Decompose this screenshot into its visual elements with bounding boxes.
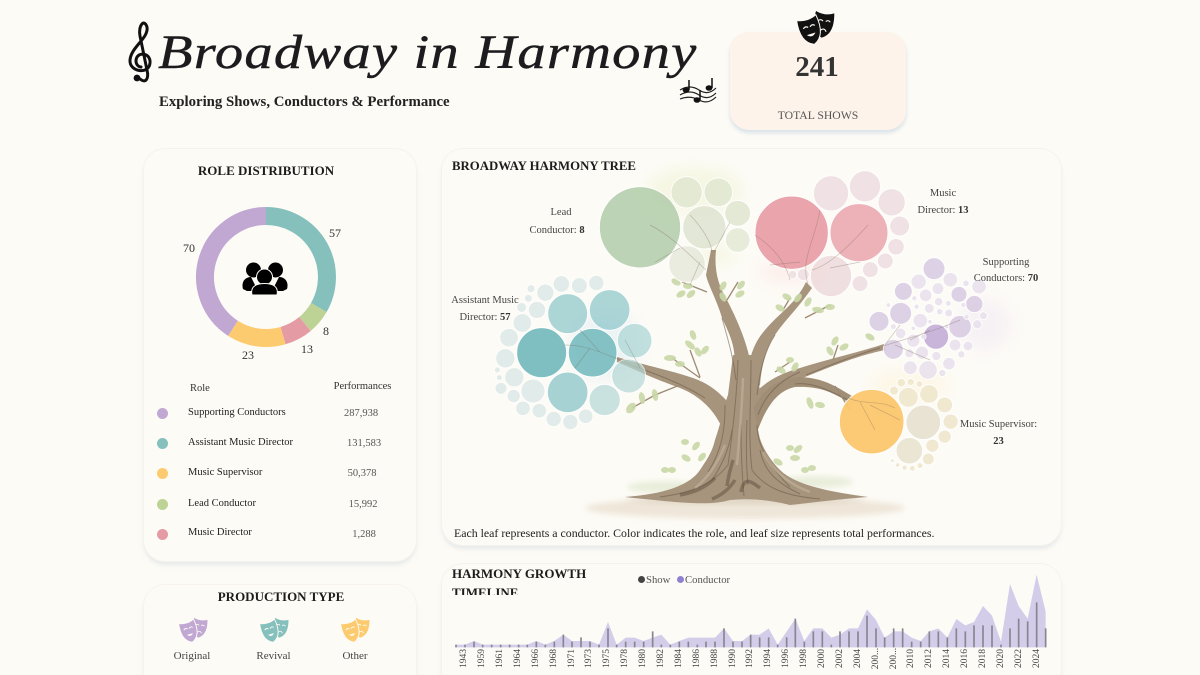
- label: music director: Director: 13: [917, 205, 969, 216]
- year axis labels: 1978: [620, 649, 630, 668]
- panel: harmony growth timeline: [441, 563, 1062, 675]
- label: lead conductor: Conductor: 8: [529, 224, 585, 236]
- KPI label: TOTAL SHOWS: [778, 109, 858, 122]
- year axis labels: 2000: [817, 649, 827, 668]
- year axis labels: 2020: [996, 649, 1006, 668]
- conductor area and show bars: [456, 575, 1046, 647]
- year axis labels: 2010: [906, 649, 916, 668]
- legend row: assistant music director: [157, 437, 381, 449]
- label: assistant music director: Assistant Music: [451, 295, 519, 306]
- year axis labels: 1980: [638, 649, 648, 668]
- label: music director: [917, 188, 969, 216]
- text: 23: [242, 348, 254, 362]
- heading: role distribution: ROLE DISTRIBUTION: [198, 163, 334, 178]
- year axis labels: 2004: [853, 649, 863, 668]
- icon: theatre masks: [797, 10, 834, 44]
- year axis labels: 2002: [835, 649, 845, 668]
- legend: show and conductor: Show: [646, 574, 670, 586]
- year axis labels: 2016: [960, 649, 970, 668]
- label: music supervisor: 23: [993, 436, 1004, 447]
- label: assistant music director: [451, 295, 519, 323]
- label: supporting conductors: Conductors: 70: [974, 273, 1038, 284]
- legend row: music director: Music Director: [188, 527, 252, 538]
- watercolor washes: [570, 168, 1011, 399]
- legend row: supporting conductors: [157, 407, 378, 419]
- icon: treble clef: [128, 22, 152, 82]
- table header: role: Role: [190, 382, 210, 394]
- panel: role distribution: [143, 148, 417, 562]
- year axis labels: 1994: [763, 649, 773, 668]
- leaf cluster: assistant music director: [494, 275, 652, 430]
- legend row: music supervisor: 50,378: [348, 468, 376, 479]
- year axis labels: 1992: [745, 649, 755, 668]
- tree trunk and branches: [617, 250, 885, 505]
- year axis labels: 1975: [602, 649, 612, 668]
- year axis labels: 1998: [799, 649, 809, 668]
- label: supporting conductors: [974, 257, 1038, 284]
- legend row: lead conductor: [157, 498, 377, 510]
- year axis labels: 1964: [513, 649, 523, 668]
- year axis labels: 200...: [871, 648, 881, 669]
- legend row: supporting conductors: Supporting Conductors: [188, 407, 286, 418]
- leaf cluster: music supervisor: [839, 378, 958, 471]
- year axis labels: 2018: [978, 649, 988, 668]
- year axis labels: 1959: [477, 649, 487, 668]
- year axis labels: 1988: [710, 649, 720, 668]
- title: Broadway in Harmony: [158, 26, 697, 79]
- label: lead conductor: Lead: [550, 206, 572, 218]
- leaf cluster: music director: [755, 171, 910, 297]
- year axis labels: 1971: [567, 649, 577, 668]
- label: music supervisor: Music Supervisor:: [960, 419, 1037, 430]
- year axis labels: 2014: [942, 649, 952, 668]
- year axis labels: 2012: [924, 649, 934, 668]
- label: original: Original: [174, 650, 210, 662]
- legend row: lead conductor: Lead Conductor: [188, 498, 256, 508]
- icon: music notes: [680, 78, 716, 103]
- label: assistant music director: Director: 57: [459, 312, 511, 323]
- KPI value: 241: [795, 51, 839, 83]
- label: supporting conductors: Supporting: [983, 257, 1029, 268]
- legend row: music director: [157, 527, 376, 540]
- legend row: supporting conductors: 287,938: [344, 408, 378, 419]
- text: 13: [301, 342, 313, 356]
- tree leaves: [624, 277, 876, 473]
- donut labels: [183, 226, 341, 362]
- leaf cluster: lead conductor: [599, 177, 751, 282]
- year axis labels: 200...: [889, 648, 899, 669]
- year axis labels: 1982: [656, 649, 666, 668]
- legend: show and conductor: [638, 574, 730, 586]
- heading: broadway harmony tree: BROADWAY HARMONY TREE: [452, 159, 636, 173]
- tree caption: Each leaf represents a conductor. Color indicates the role, and leaf size represents total performances.: [454, 526, 934, 540]
- year axis labels: 1984: [674, 649, 684, 668]
- year axis labels: 1986: [692, 649, 702, 668]
- label: revival: Revival: [256, 650, 291, 662]
- legend row: lead conductor: 15,992: [349, 498, 377, 510]
- subtitle: Exploring Shows, Conductors & Performance: [159, 94, 450, 110]
- year axis labels: 1943: [459, 649, 469, 668]
- year axis labels: 1968: [549, 649, 559, 668]
- year axis labels: [459, 648, 1042, 669]
- heading: production type: PRODUCTION TYPE: [218, 589, 344, 604]
- panel: production type: [143, 584, 417, 675]
- label: lead conductor: [529, 206, 585, 236]
- legend row: assistant music director: 131,583: [347, 438, 381, 449]
- legend row: music supervisor: [157, 467, 376, 479]
- legend row: music supervisor: Music Supervisor: [188, 467, 262, 478]
- legend: show and conductor: Conductor: [685, 574, 730, 586]
- year axis labels: 2024: [1032, 649, 1042, 668]
- KPI card: total shows: [730, 32, 906, 130]
- label: music supervisor: [960, 419, 1037, 447]
- text: 70: [183, 241, 195, 255]
- table header: performances: Performances: [334, 381, 391, 392]
- label: music director: Music: [930, 188, 956, 199]
- year axis labels: 2022: [1014, 649, 1024, 668]
- fine branch twigs over leaves: [565, 210, 960, 430]
- legend row: music director: 1,288: [352, 528, 376, 540]
- ground: [585, 476, 905, 519]
- label: other: Other: [342, 650, 368, 662]
- text: 8: [323, 324, 329, 338]
- year axis labels: 1990: [728, 649, 738, 668]
- text: 57: [329, 226, 341, 240]
- panel: broadway harmony tree: [441, 148, 1062, 546]
- leaf cluster: supporting conductors: [869, 258, 987, 379]
- year axis labels: 1973: [584, 649, 594, 668]
- year axis labels: 1961: [495, 649, 505, 668]
- year axis labels: 1966: [531, 649, 541, 668]
- year axis labels: 1996: [781, 649, 791, 668]
- legend row: assistant music director: Assistant Music Director: [188, 437, 293, 448]
